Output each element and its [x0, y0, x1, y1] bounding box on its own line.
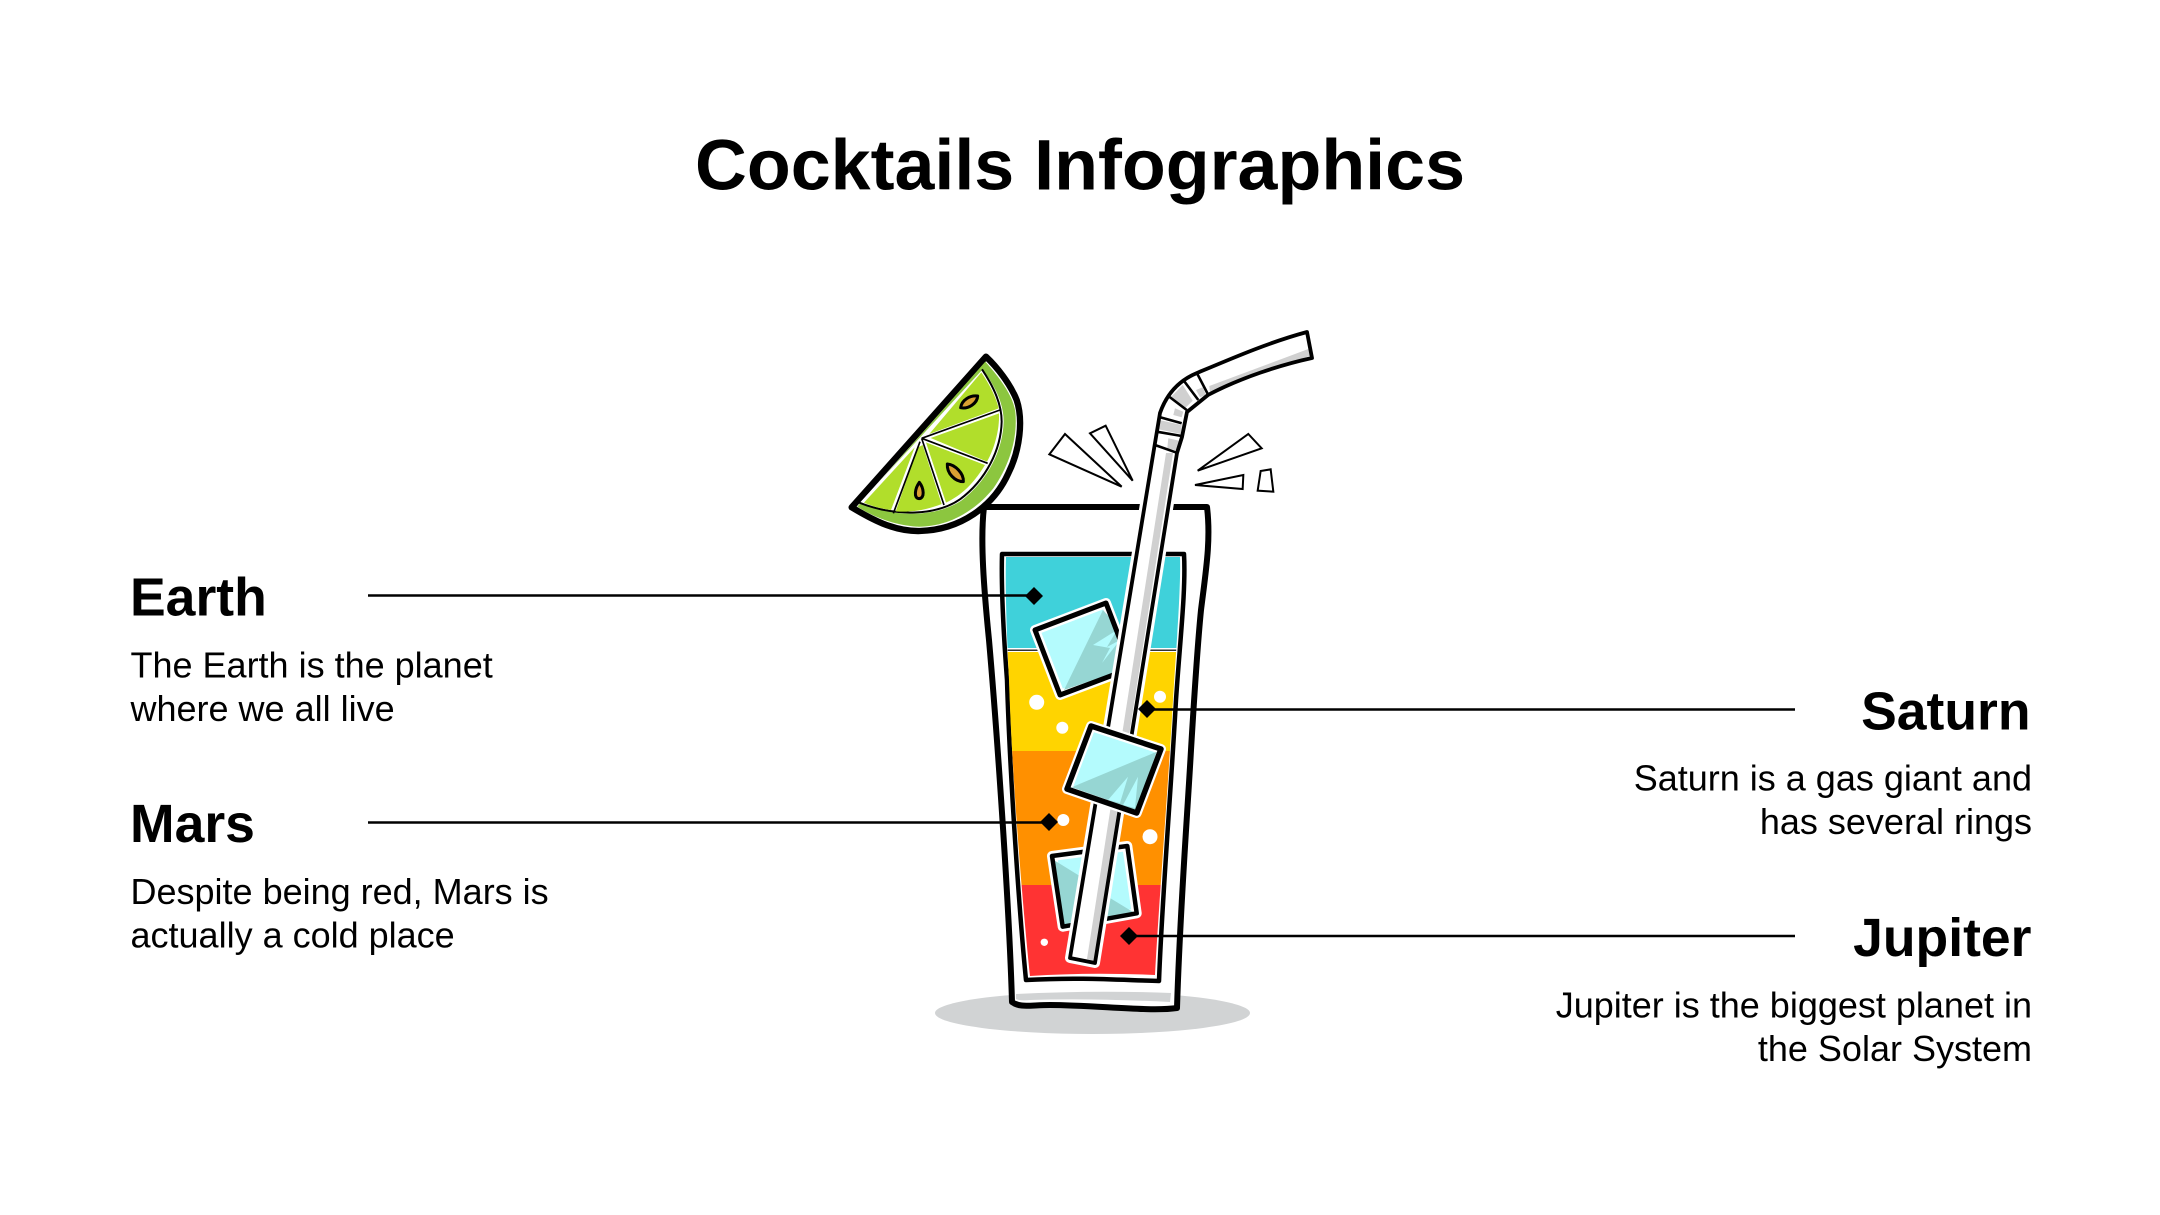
- Earth leader line: [368, 594, 1034, 597]
- Saturn marker: [1138, 700, 1156, 718]
- callout: Saturn: [1138, 682, 2032, 842]
- Earth marker: [1025, 587, 1043, 605]
- Jupiter description: Jupiter is the biggest planet in: [1556, 984, 2032, 1026]
- Saturn heading: Saturn: [1861, 682, 2030, 742]
- glass shadow: [935, 992, 1250, 1034]
- icon: lime slice: [852, 357, 1020, 531]
- ice cube: top: [1035, 603, 1131, 695]
- Saturn description: has several rings: [1760, 801, 2032, 842]
- Earth heading: Earth: [130, 568, 267, 628]
- Mars description: actually a cold place: [130, 914, 455, 955]
- shadow seen through glass: [1016, 992, 1171, 1002]
- icon: splash sparks: [1049, 426, 1273, 492]
- callout: Earth: [130, 568, 1043, 729]
- lime seeds: [915, 396, 978, 499]
- Saturn leader line: [1147, 708, 1795, 711]
- liquid layers: [1006, 557, 1180, 976]
- callout: Jupiter: [1120, 909, 2032, 1069]
- callout: Mars: [130, 795, 1058, 955]
- Jupiter description: the Solar System: [1758, 1028, 2032, 1069]
- Mars marker: [1040, 813, 1058, 831]
- Jupiter heading: Jupiter: [1853, 909, 2032, 968]
- bubbles: [1029, 691, 1166, 946]
- ice cube: bottom: [1052, 846, 1137, 927]
- illustration: cocktail glass: [935, 332, 1312, 1034]
- Mars leader line: [368, 821, 1049, 824]
- title: Cocktails Infographics: [695, 126, 1465, 206]
- Earth description: The Earth is the planet: [130, 644, 493, 686]
- Saturn description: Saturn is a gas giant and: [1634, 758, 2032, 798]
- Earth description: where we all live: [130, 688, 395, 729]
- lime rind: [857, 362, 1016, 527]
- Jupiter leader line: [1129, 935, 1795, 937]
- Mars description: Despite being red, Mars is: [130, 871, 549, 912]
- glass body: [982, 507, 1208, 1009]
- Mars heading: Mars: [130, 795, 255, 854]
- ice cube: middle: [1067, 726, 1161, 813]
- lime segments: [864, 372, 999, 512]
- inner liquid outline: [1002, 554, 1184, 981]
- straw: [1070, 332, 1312, 963]
- Jupiter marker: [1120, 927, 1138, 945]
